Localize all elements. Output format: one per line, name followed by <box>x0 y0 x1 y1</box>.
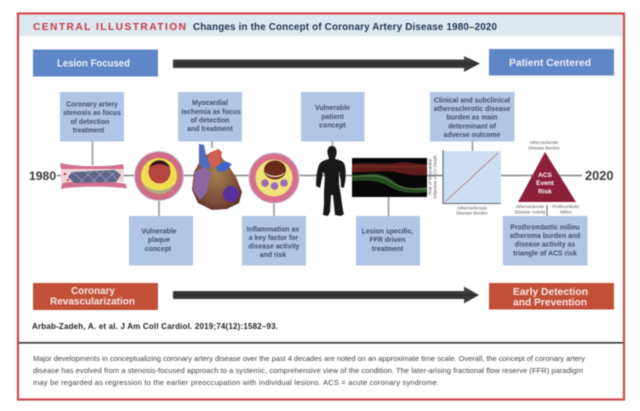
box: vulnerable patient: concept <box>319 122 346 130</box>
icon: human silhouette <box>316 146 346 216</box>
box: prothrombotic milieu: Prothrombotic milieu <box>510 224 580 232</box>
box: ischemia: ischemia as focus <box>181 109 241 116</box>
box: ischemia: and treatment <box>187 126 233 133</box>
year 1980: 1980 <box>29 169 56 183</box>
box: vulnerable patient: patient <box>321 114 344 121</box>
arrow: top progression <box>173 56 480 72</box>
triangle: ACS event risk: Milieu <box>560 210 572 214</box>
icon: stent in artery <box>60 163 127 189</box>
box: inflammation: disease activity <box>249 244 300 250</box>
box: lesion specific <box>356 216 420 266</box>
box: disease burden: Clinical and subclinical <box>434 98 510 104</box>
icon: heart <box>192 144 242 210</box>
box: early detection <box>489 283 614 310</box>
box: inflammation: a key factor for <box>249 235 299 242</box>
icon: vulnerable plaque cross-section <box>134 152 184 200</box>
caption: Major developments in conceptualizing coronary artery disease over the past 4 decades are noted on an approximate time scale. Overall, the concept of coronary artery <box>33 354 585 363</box>
box: stenosis: of detection <box>70 119 110 126</box>
caption: may be regarded as regression to the earlier preoccupation with individual lesions. ACS = acute coronary syndrome. <box>33 378 439 387</box>
box: coronary revascularization <box>33 283 158 310</box>
box: coronary revascularization: Revascularization <box>50 296 135 308</box>
triangle: ACS event risk: Event <box>536 180 555 187</box>
box: vulnerable patient <box>301 92 364 142</box>
caption: disease has evolved from a stenosis-focused approach to a systemic, comprehensive view of the condition. The later-arising fractional flow reserve (FFR) paradigm <box>33 366 583 375</box>
box: stenosis: treatment <box>73 128 105 134</box>
title label: CENTRAL ILLUSTRATION <box>33 22 186 33</box>
box: disease burden: atherosclerotic disease <box>434 106 510 113</box>
box: early detection: and Prevention <box>513 296 587 308</box>
triangle: ACS event risk: Risk <box>538 188 552 196</box>
box: prothrombotic milieu: atheroma burden and <box>510 233 580 240</box>
title: Changes in the Concept of Coronary Artery Disease 1980–2020 <box>193 22 498 33</box>
image: FFR monitor trace <box>352 158 427 197</box>
triangle: ACS event risk: Disease Burden <box>528 146 560 150</box>
year 2020: 2020 <box>585 168 613 183</box>
box: disease burden: determinant of <box>448 124 497 130</box>
caption <box>33 354 585 387</box>
divider <box>19 342 623 344</box>
box: lesion focused: Lesion Focused <box>57 58 130 70</box>
box: vulnerable patient: Vulnerable <box>315 105 350 112</box>
triangle: ACS event risk <box>515 140 580 214</box>
triangle: ACS event risk: ACS <box>538 172 553 179</box>
box: ischemia: of detection <box>190 118 230 124</box>
triangle top label: Atherosclerotic <box>529 140 559 145</box>
triangle left label: Atherosclerotic <box>515 204 545 209</box>
triangle right label: Prothrombotic <box>552 204 580 209</box>
box: early detection: Early Detection <box>513 286 588 298</box>
chart y-axis label: Risk of Myocardial <box>428 159 432 195</box>
box: ischemia: Myocardial <box>192 100 228 107</box>
box: vulnerable plaque: Vulnerable <box>142 228 177 236</box>
box: prothrombotic milieu: triangle of ACS risk <box>513 250 577 258</box>
chart y-axis label: Infarction of CV Death <box>432 155 438 199</box>
header band <box>20 15 622 36</box>
box: lesion focused <box>33 50 158 76</box>
chart: risk vs disease burden <box>428 150 501 216</box>
box: inflammation: Inflammation as <box>247 226 299 234</box>
citation: Arbab-Zadeh, A. et al. J Am Coll Cardiol. 2019;74(12):1582–93. <box>32 322 278 331</box>
box: patient centered <box>489 49 614 76</box>
box: disease burden: burden as main <box>447 114 497 122</box>
box: disease burden <box>430 92 514 142</box>
box: stenosis: stenosis as focus <box>63 110 121 117</box>
box: vulnerable plaque: plaque <box>148 237 170 244</box>
box: vulnerable plaque: concept <box>145 246 172 253</box>
box: lesion specific: Lesion specific, <box>362 228 413 236</box>
chart x-axis label: Atherosclerosis <box>457 206 488 210</box>
box: stenosis <box>60 92 124 142</box>
box: inflammation <box>242 216 306 266</box>
triangle: ACS event risk: Disease Activity <box>515 210 546 214</box>
box: inflammation: and risk <box>260 252 286 259</box>
chart: risk vs disease burden: Disease Burden <box>456 210 488 216</box>
arrow: bottom progression <box>173 286 479 304</box>
box: patient centered: Patient Centered <box>509 57 591 69</box>
box: coronary revascularization: Coronary <box>71 285 115 297</box>
box: lesion specific: treatment <box>372 246 404 253</box>
icon: inflamed plaque cross-section <box>249 153 299 203</box>
box: disease burden: adverse outcome <box>444 132 501 139</box>
box: lesion specific: FFR driven <box>370 237 406 244</box>
box: prothrombotic milieu: disease activity as <box>515 242 575 248</box>
box: vulnerable plaque <box>129 216 193 266</box>
timeline <box>29 168 613 183</box>
box: prothrombotic milieu <box>503 216 588 266</box>
box: stenosis: Coronary artery <box>66 102 118 108</box>
box: ischemia <box>178 92 242 142</box>
connector lines <box>92 141 547 216</box>
